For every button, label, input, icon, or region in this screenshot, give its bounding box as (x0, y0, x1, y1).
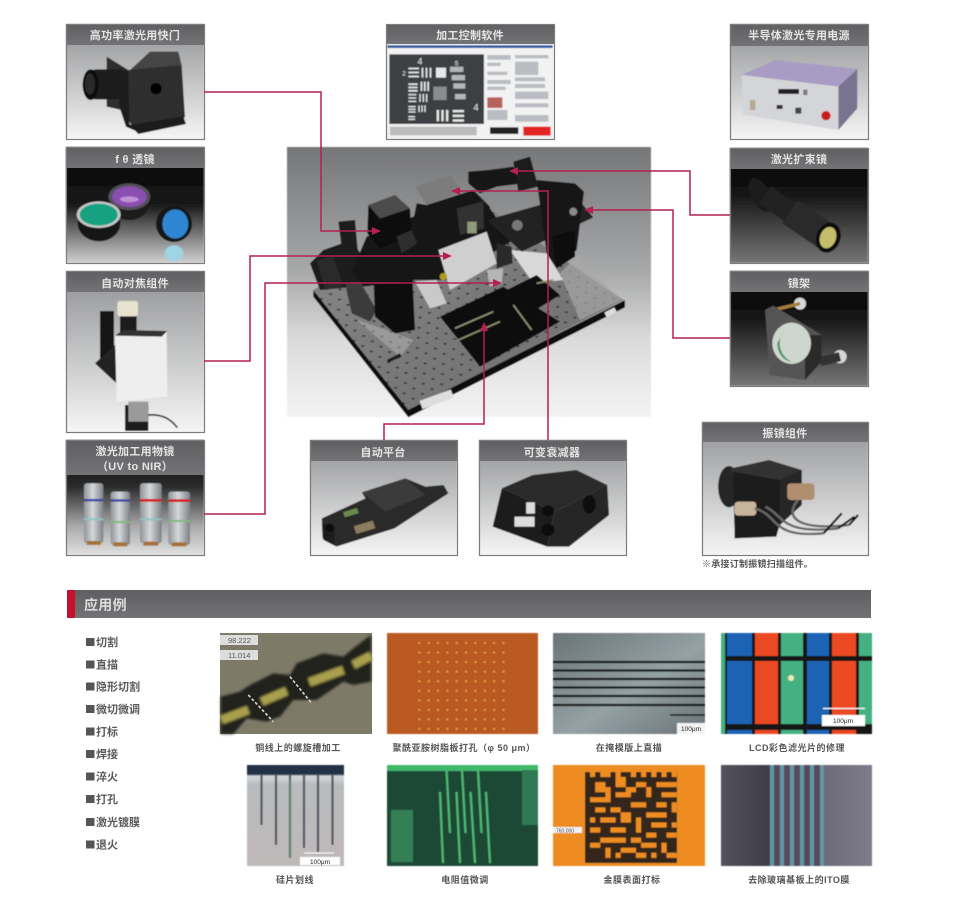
example: ITO film removal on glass: 去除玻璃基板上的ITO膜 (748, 874, 850, 885)
panel: mirror mount (730, 271, 868, 386)
example: silicon wafer scribing: 硅片划线 (276, 874, 314, 885)
photo: silicon scribe lines (247, 765, 344, 866)
software screenshot (386, 44, 554, 139)
list: application types: 淬火 (96, 770, 118, 784)
stage photo (310, 440, 457, 555)
shutter photo (66, 24, 204, 139)
galvo photo (702, 422, 868, 555)
arrow: attenuator to system (451, 187, 548, 440)
list: application types: 微切微调 (96, 702, 140, 716)
arrow: autofocus to system (204, 252, 452, 361)
photo: drilled dots (387, 633, 538, 734)
software screenshot: 2 (402, 70, 406, 77)
note: custom galvo scan unit: ※承接订制振镜扫描组件。 (702, 558, 813, 569)
photo: mask lines (553, 633, 705, 734)
panel: f-theta lens (66, 147, 204, 264)
list: application types: 切割 (96, 635, 118, 649)
photo: copper wire (220, 633, 372, 734)
section heading: application examples (67, 590, 871, 618)
panel: variable attenuator: 可变衰减器 (524, 445, 580, 459)
arrow: stage to system (384, 322, 488, 440)
software screenshot: 5 (455, 61, 459, 68)
panel: central system photo (287, 147, 651, 417)
panel: high power laser shutter: 高功率激光用快门 (90, 28, 180, 42)
panel: beam expander: 激光扩束镜 (771, 152, 827, 166)
panel: automatic stage: 自动平台 (360, 445, 406, 459)
example: spiral groove on copper wire: 11.014 (228, 651, 250, 660)
example: polyimide drilling (387, 633, 538, 753)
example: polyimide drilling: 聚酰亚胺树脂板打孔（φ 50 μm） (393, 742, 535, 753)
example: direct writing on mask: 100μm (681, 726, 701, 733)
list: application types: 隐形切割 (96, 680, 140, 694)
example: LCD color filter repair (721, 633, 872, 753)
photo: ITO stripes (721, 765, 872, 866)
photo: LCD pixels (721, 633, 872, 734)
autofocus photo (66, 271, 204, 432)
panel: semiconductor laser power supply: 半导体激光专用电源 (748, 28, 850, 42)
example: direct writing on mask (553, 633, 705, 753)
example: direct writing on mask: 在掩模版上直描 (596, 742, 662, 753)
panel: control software: 加工控制软件 (436, 28, 504, 42)
list: application types: 焊接 (96, 747, 118, 761)
example: spiral groove on copper wire: 铜线上的螺旋槽加工 (255, 742, 341, 753)
power supply photo (730, 24, 868, 139)
lens photo (66, 147, 204, 263)
example: LCD color filter repair: 100μm (833, 718, 853, 725)
panel: autofocus unit: 自动对焦组件 (101, 276, 169, 290)
list: application types: 退火 (96, 838, 118, 852)
panel: objective lenses: （UV to NIR） (97, 460, 173, 473)
arrow: beam expander to system (509, 167, 730, 215)
panel: autofocus unit (66, 271, 204, 432)
software screenshot: 4 (473, 103, 479, 113)
arrow: shutter to system (204, 92, 381, 235)
list: application types (86, 635, 140, 852)
example: resistor trimming: 电阻值微调 (441, 874, 489, 885)
attenuator photo (479, 440, 626, 555)
example: LCD color filter repair: LCD彩色滤光片的修理 (749, 742, 845, 753)
list: application types: 打孔 (96, 792, 118, 806)
section heading: application examples: 应用例 (84, 597, 127, 613)
panel: automatic stage (310, 440, 458, 556)
list: application types: 打标 (96, 724, 118, 738)
panel: objective lenses: 激光加工用物镜 (95, 444, 175, 458)
panel: control software (386, 24, 554, 140)
panel: beam expander (730, 148, 868, 264)
photo: data matrix (553, 765, 705, 866)
arrow: mirror mount to system (584, 206, 730, 338)
photo: resistor traces (387, 765, 538, 866)
expander photo (730, 148, 868, 263)
objective photo (66, 440, 204, 555)
panel: f-theta lens: f θ 透镜 (115, 152, 155, 166)
example: silicon wafer scribing (247, 765, 344, 885)
panel: mirror mount: 镜架 (788, 276, 810, 290)
panel: galvo unit: 振镜组件 (762, 426, 808, 440)
panel: high power laser shutter (66, 24, 204, 140)
panel: semiconductor laser power supply (730, 24, 868, 140)
example: resistor trimming (387, 765, 538, 885)
panel: variable attenuator (479, 440, 626, 556)
example: gold film surface marking (553, 765, 705, 885)
example: gold film surface marking: 760.000 (556, 828, 574, 834)
example: gold film surface marking: 金膜表面打标 (603, 874, 661, 885)
panel: galvo unit (702, 422, 868, 556)
list: application types: 直描 (96, 658, 118, 672)
example: silicon wafer scribing: 100μm (310, 859, 330, 866)
arrow: objective to system (204, 279, 502, 514)
list: application types: 激光镀膜 (96, 815, 140, 829)
example: spiral groove on copper wire (220, 633, 372, 753)
mount photo (730, 271, 868, 386)
example: ITO film removal on glass (721, 765, 872, 885)
panel: objective lenses (66, 440, 204, 556)
software screenshot: 4 (417, 56, 423, 66)
example: spiral groove on copper wire: 98.222 (228, 636, 251, 645)
